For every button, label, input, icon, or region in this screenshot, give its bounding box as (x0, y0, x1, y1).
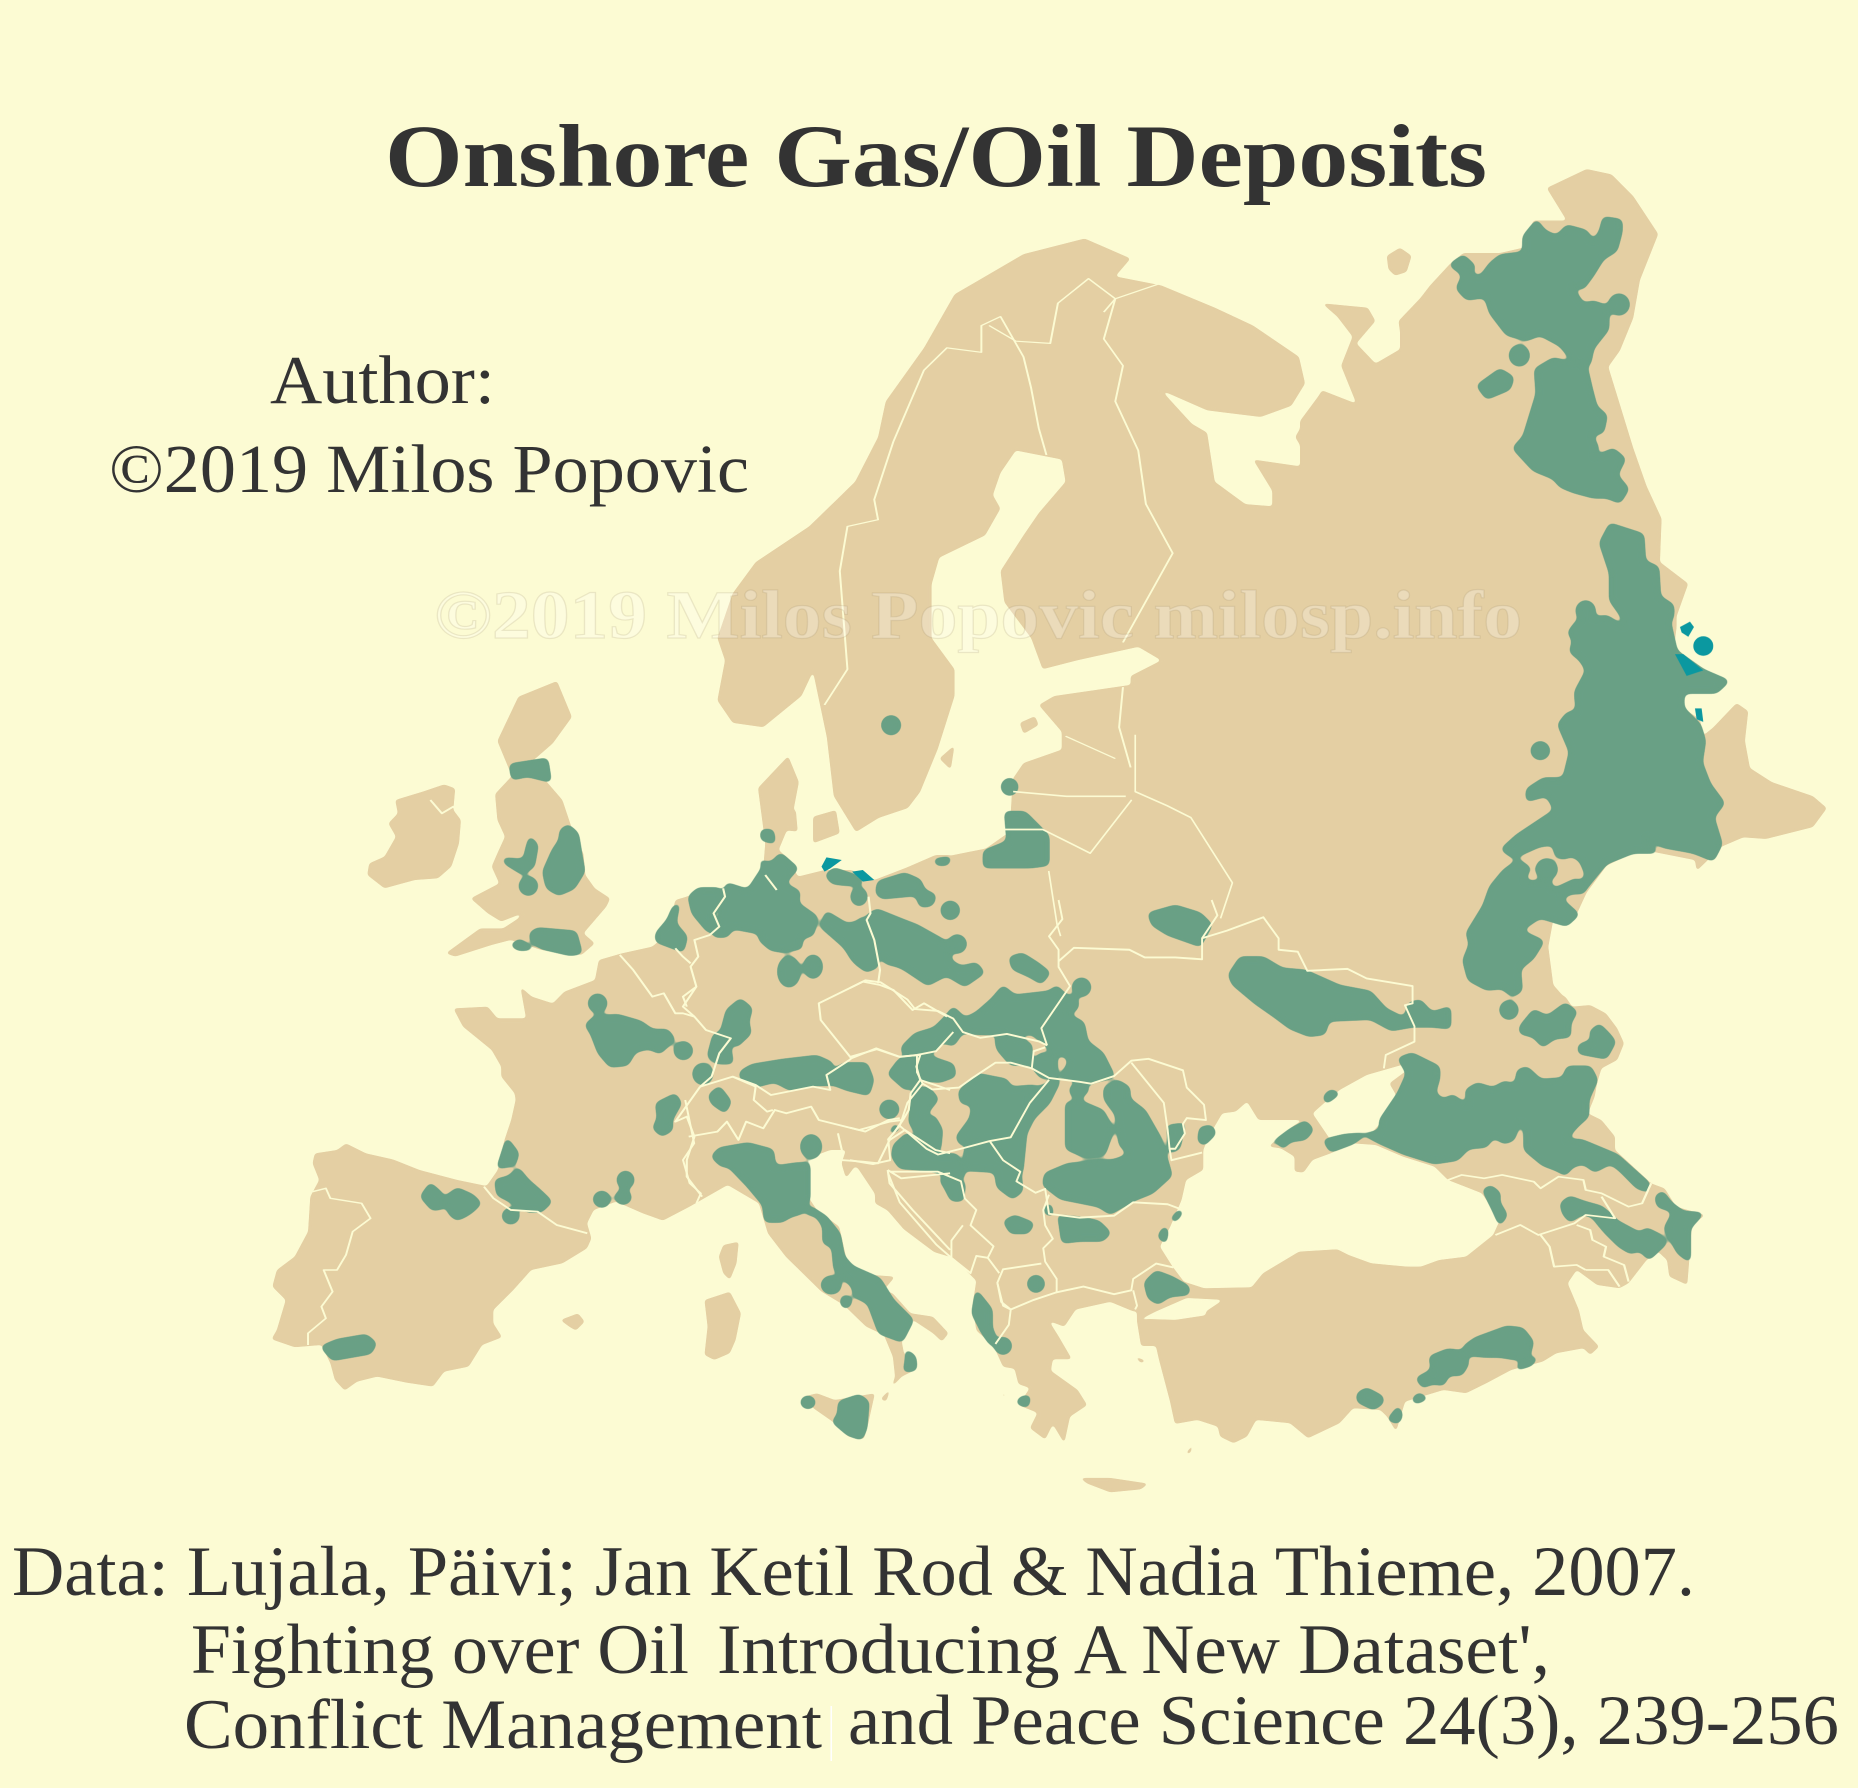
citation line 1: Data: Lujala, Päivi; Jan Ketil Rod & Nadia Thieme, 2007. (12, 1533, 1695, 1611)
data citation (12, 1533, 1839, 1764)
teal deposits: Caspian (1675, 622, 1713, 722)
map: Europe (271, 169, 1827, 1492)
offshore deposits in teal (821, 622, 1713, 882)
deposits: Timan-Pechora, Volga-Ural, Caspian (1450, 218, 1728, 996)
deposits: Scotland, Sweden, Baltic (510, 716, 1049, 867)
land masses (271, 169, 1827, 1492)
borders: eastern Europe and Balkans (850, 900, 1414, 1344)
land: Urals, Volga and Caspian north (1300, 169, 1827, 1000)
gas and oil deposits (321, 218, 1728, 1439)
land: Scandinavia, Finland, Baltics, north Russia (717, 238, 1550, 832)
teal deposits: Baltic coast (821, 857, 874, 882)
borders: Spain and Portugal, France and Italy (308, 1100, 701, 1345)
borders: Scandinavia and Finland (824, 279, 1173, 767)
deposits: Italy and Andalusia (321, 1207, 916, 1439)
land: central Europe interior (936, 770, 1540, 1007)
citation line 3a: Conflict Management (184, 1686, 822, 1764)
deposits: Caucasus and Turkey (1324, 979, 1703, 1423)
sea: Marmara (1137, 1298, 1223, 1321)
author block (109, 342, 749, 507)
author label: Author: (270, 342, 495, 418)
citation line 2b: Introducing A New Dataset', (717, 1611, 1550, 1689)
inland seas (1137, 1063, 1500, 1321)
citation line 3b: and Peace Science 24(3), 239-256 (848, 1682, 1839, 1760)
land: British Isles, France, Germany (367, 681, 950, 1117)
deposits: Poland, Carpathians, Pannonian basin, Balkans, Ukraine (850, 894, 1450, 1407)
borders: Caucasus (1448, 1175, 1651, 1287)
deposits: Britain, France, Germany, Alps (421, 825, 950, 1224)
citation line 2a: Fighting over Oil (191, 1611, 689, 1689)
sea: Black Sea (1160, 1063, 1500, 1288)
land: Balkans and Greece (850, 900, 1233, 1492)
watermark: ©2019 Milos Popovic milosp.info (434, 577, 1522, 653)
borders: Baltics, Belarus (1001, 735, 1232, 936)
title: Onshore Gas/Oil Deposits (385, 108, 1487, 206)
land: Iberia, southern France, Italy (271, 1100, 950, 1439)
author name: ©2019 Milos Popovic (109, 431, 749, 507)
land: Caucasus, Black Sea rim, Turkey (1136, 980, 1705, 1443)
borders: western Europe (430, 800, 950, 1250)
national borders (308, 279, 1651, 1345)
